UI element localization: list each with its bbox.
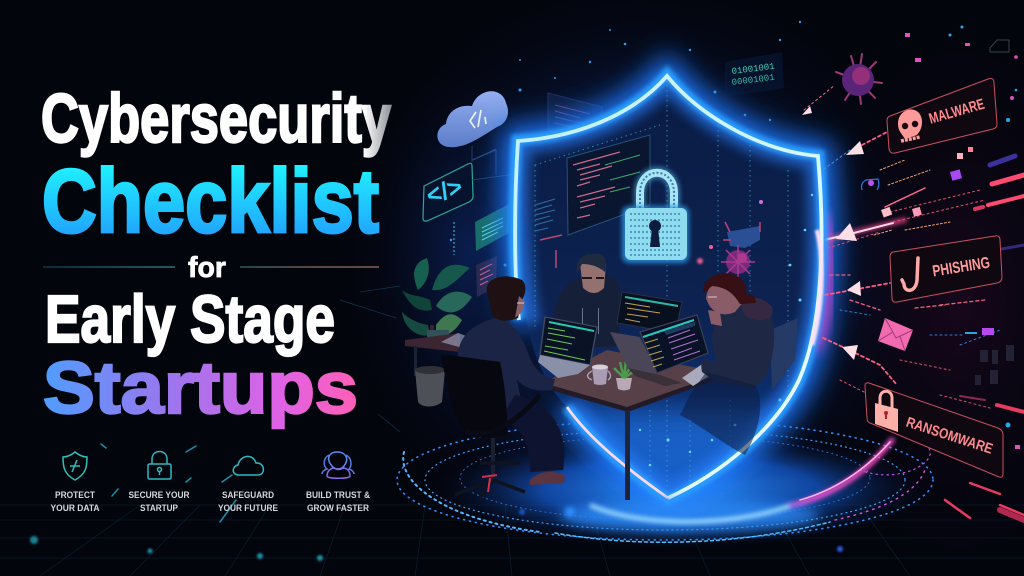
laptop: left developer: [538, 317, 597, 378]
large plant: [402, 258, 472, 345]
shield: [520, 83, 820, 492]
code tag box: [423, 150, 516, 255]
benefit: safeguard your future: SAFEGUARD: [222, 490, 274, 501]
benefit: build trust and grow faster: BUILD TRUST &: [306, 490, 370, 501]
benefit: secure your startup: [128, 452, 190, 514]
benefit: safeguard your future: YOUR FUTURE: [218, 503, 278, 514]
floor glow: [430, 432, 930, 548]
icon: hook: [902, 258, 918, 290]
label: ransomware: RANSOMWARE: [904, 415, 995, 458]
icon: digital padlock: [622, 173, 689, 263]
title line: Startups: Startups: [43, 348, 358, 429]
office chair: [441, 354, 540, 498]
title: [41, 80, 391, 429]
benefit: build trust and grow faster: GROW FASTER: [307, 503, 369, 514]
title rule right: [240, 266, 379, 268]
developer: center: [552, 254, 621, 347]
laptop: center rear: [617, 292, 682, 333]
threat arrows: [802, 106, 864, 360]
benefit: protect your data: YOUR DATA: [50, 503, 100, 514]
icon: envelope: [878, 318, 913, 351]
icon: cloud: [437, 91, 508, 165]
binary panel: [725, 52, 784, 97]
shield bright edge: [514, 74, 823, 500]
label: phishing: PHISHING: [931, 255, 991, 280]
callout: phishing: [890, 236, 1002, 302]
title line: for: for: [188, 252, 226, 284]
shield code screen: [535, 135, 650, 268]
code tag box: </>: [423, 172, 466, 210]
benefit: protect your data: [50, 452, 100, 514]
back panel: code screen: [548, 93, 602, 150]
background sparkles: [450, 21, 801, 266]
pink panel: [476, 256, 497, 297]
shield glow: [515, 74, 828, 500]
icon: virus behind shield: [697, 200, 763, 278]
green panel: [475, 204, 509, 251]
side desk and pot: [405, 333, 478, 406]
benefit: secure your startup: SECURE YOUR: [128, 490, 190, 501]
benefit: build trust and grow faster: [306, 452, 370, 514]
title rule left: [43, 266, 175, 268]
developer: left, seen from behind: [457, 276, 565, 485]
benefit: protect your data: PROTECT: [55, 490, 95, 501]
threat particles: [862, 26, 1020, 449]
icon: virus top right: [836, 54, 882, 104]
icon: people: [322, 452, 354, 478]
decorative left streaks: [30, 286, 843, 561]
icon: lock: [875, 391, 898, 432]
coffee cup: [588, 364, 610, 385]
developer: right: [680, 273, 798, 455]
binary panel: 01001001: [731, 62, 775, 77]
benefit: secure your startup: STARTUP: [140, 503, 179, 514]
title line: Cybersecurity: Cybersecurity: [41, 80, 391, 157]
callout: ransomware: [865, 383, 1003, 477]
icon: cloud: [233, 456, 263, 475]
title line: Checklist: Checklist: [42, 152, 379, 252]
label: malware: MALWARE: [927, 96, 986, 128]
floor grid: [0, 505, 1024, 576]
floor light pool: [560, 500, 820, 532]
callout: malware: [887, 78, 997, 153]
small plant: [614, 360, 636, 390]
pink and right side data lines: [804, 85, 1024, 520]
title line: Early Stage: Early Stage: [45, 282, 335, 357]
binary panel: 00001001: [731, 73, 775, 88]
benefit: safeguard your future: [218, 456, 278, 514]
icon: shield: [63, 452, 87, 480]
icon: skull: [898, 109, 922, 141]
floor data rings: [397, 420, 933, 542]
desk: [543, 350, 723, 500]
icon: padlock: [148, 452, 171, 479]
laptop: grey rear and right screen: [610, 315, 715, 386]
